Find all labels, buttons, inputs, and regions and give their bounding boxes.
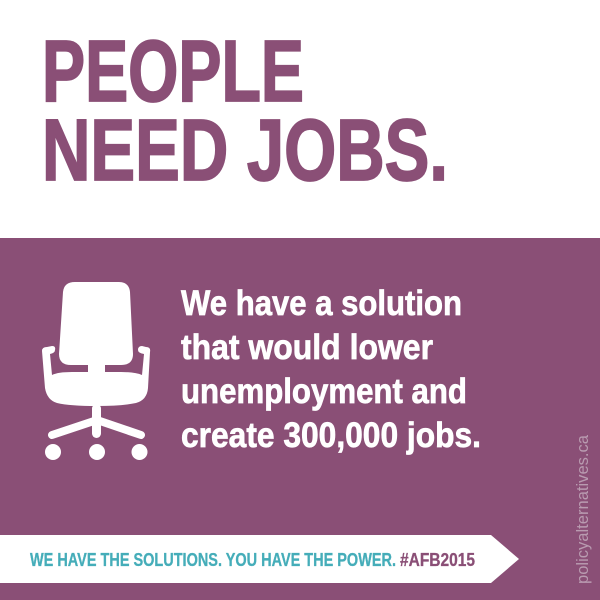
website credit: policyalternatives.ca	[573, 434, 592, 584]
banner shape	[0, 535, 519, 583]
banner hashtag: #AFB2015	[400, 549, 475, 570]
chair wheels	[45, 444, 61, 460]
title: PEOPLE	[42, 23, 304, 120]
text block: solution statement: We have a solution	[181, 284, 462, 323]
text block: solution statement: create 300,000 jobs.	[181, 416, 481, 455]
title: NEED JOBS.	[42, 102, 448, 199]
icon: office chair	[42, 282, 150, 460]
text block: solution statement: unemployment and	[181, 372, 467, 411]
chair back	[59, 282, 133, 373]
chair stem	[92, 404, 101, 438]
banner slogan: WE HAVE THE SOLUTIONS. YOU HAVE THE POWER.	[30, 549, 396, 570]
text block: solution statement: that would lower	[181, 328, 433, 367]
chair seat with armrests	[42, 346, 150, 406]
panel: purple solution panel	[0, 238, 600, 600]
title	[42, 23, 448, 199]
text block: solution statement	[181, 284, 481, 455]
chair base legs	[52, 420, 141, 435]
arrow banner	[0, 535, 519, 583]
